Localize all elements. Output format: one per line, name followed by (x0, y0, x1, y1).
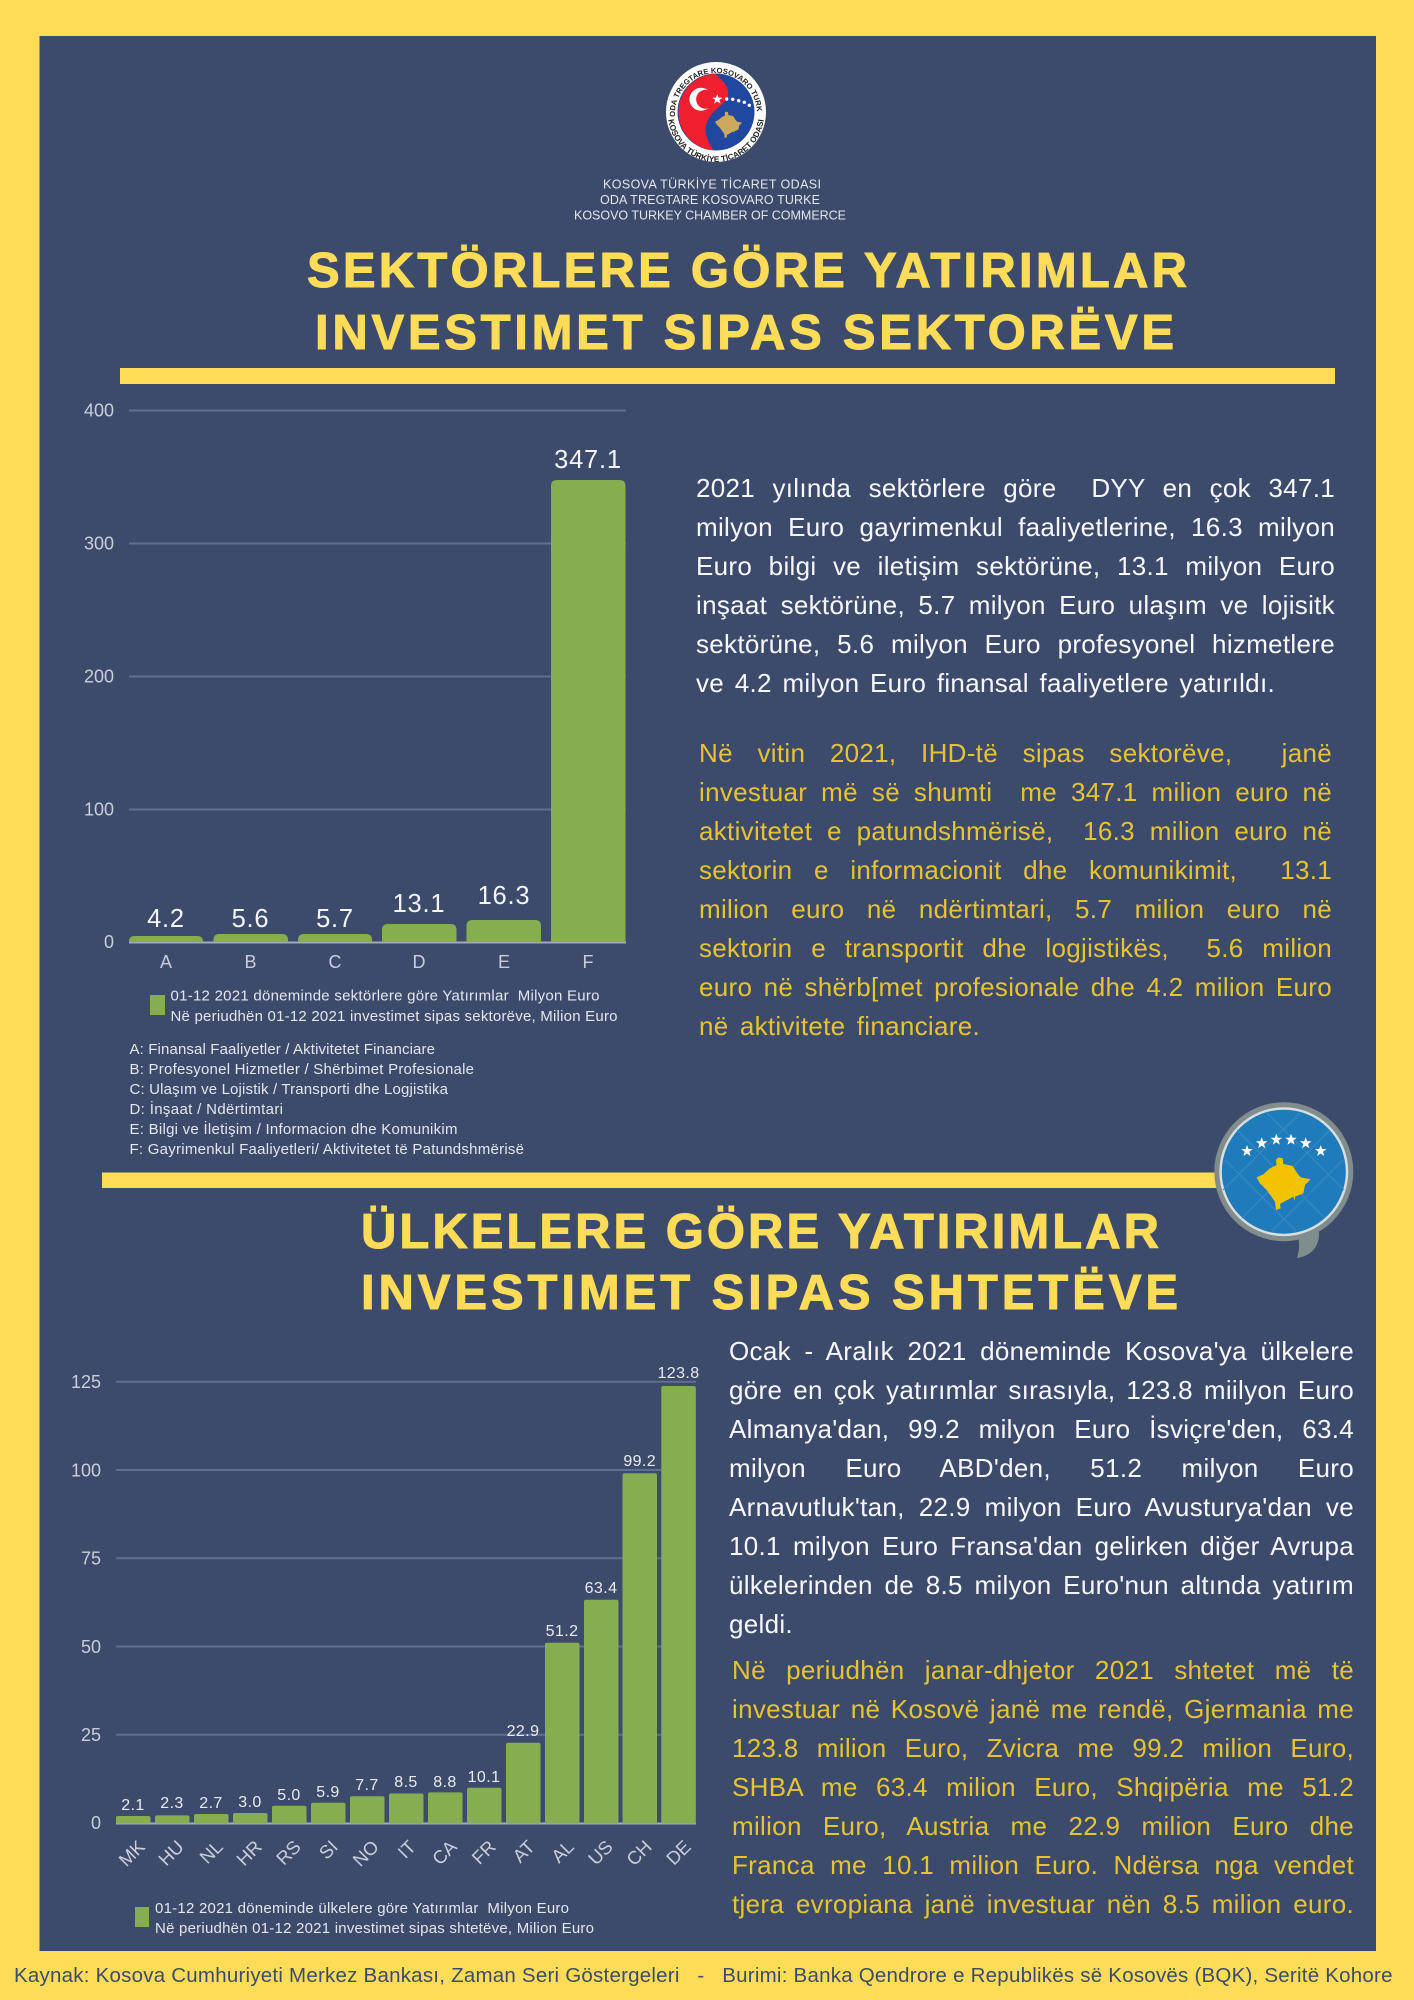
sector key list: E: Bilgi ve İletişim / Informacion dhe Komunikim (130, 1120, 458, 1138)
logo: chamber of commerce seal: KOSOVA TÜRKİYE TİCARET ODASI (668, 119, 764, 162)
legend: country chart: 01-12 2021 döneminde ülkelere göre Yatırımlar Milyon Euro (155, 1900, 569, 1917)
bar chart: investments by country: 5.9 (316, 1784, 340, 1801)
text block: Turkish country summary: göre en çok yatırımlar sırasıyla, 123.8 miilyon Euro (729, 1375, 1354, 1405)
bar chart: investments by country: 51.2 (546, 1623, 578, 1640)
text block: Albanian sector summary (699, 738, 1332, 1040)
bar chart: investments by sector: 5.7 (316, 905, 354, 933)
bar chart: investments by country: DE (662, 1836, 695, 1869)
bar chart: investments by country: CA (428, 1836, 461, 1869)
text block: Turkish country summary (729, 1336, 1354, 1639)
bar chart: investments by sector: A (160, 952, 172, 972)
sector key list: A: Finansal Faaliyetler / Aktivitetet Financiare (130, 1041, 435, 1058)
bar chart: investments by sector: 4.2 (147, 905, 185, 933)
bar chart: investments by sector: B (244, 952, 257, 972)
text block: Albanian sector summary: aktivitetet e patundshmërisë, 16.3 milion euro në (699, 816, 1332, 846)
text block: Albanian sector summary: sektorin e transportit dhe logjistikës, 5.6 milion (699, 932, 1332, 962)
text block: Albanian country summary: 123.8 milion Euro, Zvicra me 99.2 milion Euro, (732, 1733, 1354, 1763)
legend: sector chart: 01-12 2021 döneminde sektörlere göre Yatırımlar Milyon Euro (170, 988, 600, 1004)
chamber name text: KOSOVA TÜRKİYE TİCARET ODASI (603, 178, 821, 192)
bar chart: investments by country: NO (348, 1836, 383, 1870)
text block: Turkish sector summary: inşaat sektörüne, 5.7 milyon Euro ulaşım ve lojisitk (696, 590, 1335, 620)
bar chart: investments by sector (84, 400, 626, 972)
text block: Albanian country summary: investuar në Kosovë janë me rendë, Gjermania me (732, 1694, 1354, 1724)
bar chart: investments by country: 8.8 (433, 1774, 457, 1791)
title: investments by sector (307, 244, 1187, 360)
bar chart: investments by sector: F (582, 952, 594, 972)
bar chart: investments by sector: 200 (84, 666, 114, 686)
bar chart: investments by country: US (584, 1836, 617, 1869)
bar chart: investments by country: IT (393, 1836, 420, 1862)
bar chart: investments by country: AL (547, 1836, 578, 1867)
chamber name text (574, 178, 846, 222)
bar chart: investments by country: CH (622, 1836, 656, 1870)
bar chart: investments by country: 5.0 (277, 1787, 301, 1804)
bar chart: investments by country: AT (508, 1836, 539, 1867)
bar chart: investments by sector: C (328, 952, 342, 972)
text block: Turkish sector summary: milyon Euro gayrimenkul faaliyetlerine, 16.3 milyon (696, 512, 1335, 542)
bar chart: investments by country: 7.7 (355, 1777, 379, 1794)
divider bar: middle (102, 1172, 1227, 1188)
legend: country chart: Në periudhën 01-12 2021 investimet sipas shtetëve, Milion Euro (155, 1920, 594, 1937)
bar chart: investments by country: 75 (81, 1548, 101, 1568)
text block: Albanian sector summary: në aktivitete financiare. (699, 1010, 980, 1040)
text block: Turkish sector summary (696, 473, 1335, 698)
bar chart: investments by country: 8.5 (394, 1774, 418, 1791)
text block: Albanian country summary: milion Euro, Austria me 22.9 milion Euro dhe (732, 1811, 1354, 1841)
text block: Albanian country summary: SHBA me 63.4 milion Euro, Shqipëria me 51.2 (732, 1772, 1354, 1802)
text block: Turkish sector summary: 2021 yılında sektörlere göre DYY en çok 347.1 (696, 473, 1335, 503)
bar chart: investments by sector: 347.1 (554, 446, 622, 474)
text block: Turkish country summary: Almanya'dan, 99.2 milyon Euro İsviçre'den, 63.4 (729, 1414, 1354, 1444)
sector key list: B: Profesyonel Hizmetler / Shërbimet Profesionale (130, 1061, 474, 1078)
bar chart: investments by country: 25 (81, 1725, 101, 1745)
bar chart: investments by country: 2.3 (160, 1795, 184, 1812)
icon: Kosovo flag speech bubble (1214, 1102, 1353, 1258)
bar chart: investments by sector: 300 (84, 534, 114, 554)
legend: sector chart: Në periudhën 01-12 2021 investimet sipas sektorëve, Milion Euro (170, 1008, 618, 1025)
text block: Turkish country summary: 10.1 milyon Euro Fransa'dan gelirken diğer Avrupa (729, 1531, 1354, 1561)
sector key list (130, 1041, 524, 1158)
sector key list: F: Gayrimenkul Faaliyetleri/ Aktivitetet të Patundshmërisë (130, 1141, 524, 1158)
text block: Turkish country summary: Ocak - Aralık 2021 döneminde Kosova'ya ülkelere (729, 1336, 1354, 1366)
bar chart: investments by sector: E (498, 952, 510, 972)
bar chart: investments by sector: 0 (104, 932, 114, 952)
bar chart: investments by country: 99.2 (623, 1453, 656, 1470)
chamber name text: ODA TREGTARE KOSOVARO TURKE (600, 193, 820, 207)
bar chart: investments by country: 22.9 (507, 1723, 539, 1740)
bar chart: investments by country: RS (272, 1836, 305, 1869)
text block: Albanian sector summary: euro në shërb[met profesionale dhe 4.2 milion Euro (699, 972, 1332, 1002)
text block: Albanian sector summary: milion euro në ndërtimtari, 5.7 milion euro në (699, 894, 1332, 924)
bar chart: investments by country: 125 (71, 1372, 101, 1392)
logo: chamber of commerce seal (666, 62, 766, 162)
sector key list: D: İnşaat / Ndërtimtari (130, 1100, 283, 1118)
bar chart: investments by country: 50 (81, 1637, 101, 1657)
text block: Turkish country summary: Arnavutluk'tan, 22.9 milyon Euro Avusturya'dan ve (729, 1492, 1354, 1522)
title: investments by sector: INVESTIMET SIPAS SEKTORËVE (315, 306, 1174, 360)
bar chart: investments by country: HU (154, 1836, 188, 1870)
text block: Turkish country summary: geldi. (729, 1609, 793, 1639)
bar chart: investments by country: FR (468, 1836, 500, 1868)
bar chart: investments by sector: 100 (84, 800, 114, 820)
bar chart: investments by country: 100 (71, 1460, 101, 1480)
title: investments by country: ÜLKELERE GÖRE YATIRIMLAR (361, 1205, 1159, 1259)
bar chart: investments by sector: 5.6 (232, 905, 269, 933)
text block: Albanian sector summary: sektorin e informacionit dhe komunikimit, 13.1 (699, 854, 1332, 884)
bar chart: investments by country: 123.8 (657, 1365, 700, 1382)
text block: Turkish sector summary: ve 4.2 milyon Euro finansal faaliyetlere yatırıldı. (696, 668, 1275, 698)
bar chart: investments by sector: 16.3 (478, 882, 530, 910)
title: investments by country: INVESTIMET SIPAS SHTETËVE (361, 1266, 1178, 1320)
bar chart: investments by country: 3.0 (238, 1794, 262, 1811)
text block: Albanian country summary: tjera evropiana janë investuar nën 8.5 milion euro. (732, 1889, 1354, 1919)
bar chart: investments by country: MK (114, 1836, 149, 1870)
footer source line: Kaynak: Kosova Cumhuriyeti Merkez Bankası, Zaman Seri Göstergeleri - Burimi: Banka Qendrore e Republikës së Kosovës (BQK), Seritë Kohore (14, 1964, 1392, 1987)
text block: Albanian country summary (732, 1655, 1354, 1919)
text block: Turkish country summary: milyon Euro ABD'den, 51.2 milyon Euro (729, 1453, 1354, 1483)
bar chart: investments by country: HR (232, 1836, 266, 1870)
text block: Albanian country summary: Franca me 10.1 milion Euro. Ndërsa nga vendet (732, 1850, 1354, 1880)
text block: Turkish sector summary: Euro bilgi ve iletişim sektörüne, 13.1 milyon Euro (696, 551, 1335, 581)
text block: Turkish sector summary: sektörüne, 5.6 milyon Euro profesyonel hizmetlere (696, 629, 1335, 659)
legend: sector chart (150, 988, 618, 1025)
legend: country chart (135, 1900, 594, 1937)
text block: Albanian country summary: Në periudhën janar-dhjetor 2021 shtetet më të (732, 1655, 1354, 1685)
bar chart: investments by sector: D (412, 952, 426, 972)
bar chart: investments by country: NL (195, 1836, 227, 1868)
text block: Albanian sector summary: investuar më së shumti me 347.1 milion euro në (699, 776, 1332, 806)
bar chart: investments by country: 2.7 (199, 1795, 223, 1812)
bar chart: investments by country: SI (315, 1836, 342, 1863)
bar chart: investments by sector: 13.1 (393, 890, 445, 918)
title: investments by country (361, 1205, 1178, 1320)
sector key list: C: Ulaşım ve Lojistik / Transporti dhe Logjistika (130, 1081, 449, 1098)
chamber name text: KOSOVO TURKEY CHAMBER OF COMMERCE (574, 208, 846, 222)
text block: Turkish country summary: ülkelerinden de 8.5 milyon Euro'nun altında yatırım (729, 1570, 1354, 1600)
bar chart: investments by sector: 400 (84, 400, 114, 420)
bar chart: investments by country: 63.4 (585, 1580, 617, 1597)
bar chart: investments by country: 0 (91, 1813, 101, 1833)
bar chart: investments by country: 10.1 (468, 1769, 500, 1786)
divider bar: upper (120, 368, 1335, 384)
bar chart: investments by country: 2.1 (121, 1797, 145, 1814)
text block: Albanian sector summary: Në vitin 2021, IHD-të sipas sektorëve, janë (699, 738, 1332, 768)
bar chart: investments by country (71, 1365, 700, 1870)
title: investments by sector: SEKTÖRLERE GÖRE YATIRIMLAR (307, 244, 1187, 298)
